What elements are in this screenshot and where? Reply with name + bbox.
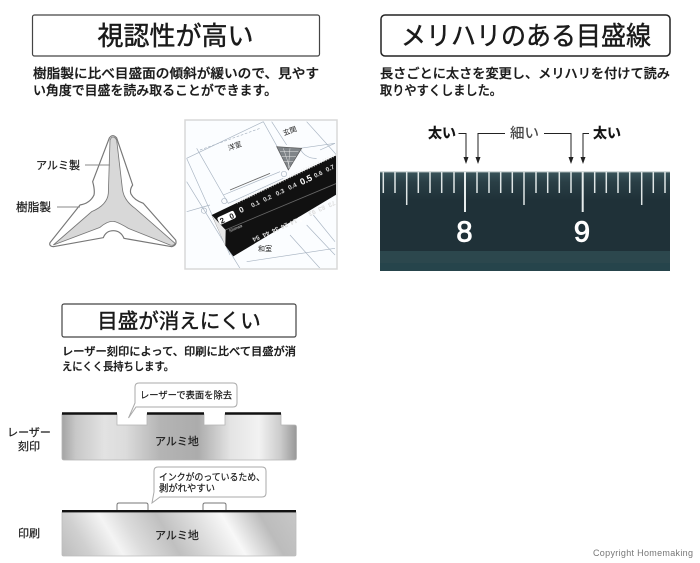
ruler: 24 [279, 221, 289, 230]
ink layer [62, 510, 296, 512]
ruler: 93 [307, 208, 316, 217]
callout: thick right: 太い [593, 125, 621, 141]
callout: thick left: 太い [428, 125, 456, 141]
text block: wear description: レーザー刻印によって、印刷に比べて目盛が消 [62, 344, 296, 358]
text block: wear description [62, 344, 296, 373]
ruler: 14 [288, 217, 298, 226]
ruler body [380, 172, 670, 271]
heading: visibility [32, 15, 320, 56]
label: printing: 印刷 [18, 527, 40, 540]
material label: アルミ地 [155, 529, 199, 542]
ruler: 83 [316, 203, 326, 213]
ruler: 0.5 [298, 173, 314, 187]
photo: ruler on blueprint [185, 120, 337, 269]
heading: contrast graduation lines [381, 15, 670, 56]
callout: laser removes surface [128, 383, 237, 418]
label: resin [16, 200, 80, 214]
label: laser engraving: レーザー [7, 426, 51, 439]
text block: wear description: えにくく長持ちします。 [62, 359, 174, 373]
callout: ink peels off [152, 467, 266, 503]
text block: visibility description [33, 66, 319, 98]
callout: thick left [428, 125, 468, 164]
callout: ink peels off: 剥がれやすい [159, 482, 215, 494]
label: laser engraving [7, 426, 51, 453]
ruler: 0 [238, 205, 246, 215]
callout: thin [476, 125, 574, 164]
ruler: 0.3 [275, 188, 286, 198]
tick marks: thin [383, 172, 665, 205]
ruler: 2 0 [218, 211, 236, 226]
heading: contrast graduation lines: メリハリのある目盛線 [401, 21, 651, 51]
heading: visibility: 視認性が高い [97, 21, 254, 51]
text block: contrast description [380, 66, 670, 98]
copyright: Copyright Homemaking [593, 548, 693, 558]
ruler: 0.4 [287, 182, 299, 192]
ruler: 54 [251, 233, 260, 243]
text block: contrast description: 長さごとに太さを変更し、メリハリを付けて読み [380, 66, 670, 81]
heading: hard to wear off [62, 304, 296, 337]
ruler: 44 [261, 229, 270, 238]
ruler: Shinwa [228, 223, 244, 233]
label: resin: 樹脂製 [16, 200, 52, 214]
photo: ruler on blueprint: 洋室 [227, 139, 243, 152]
callout: laser removes surface: レーザーで表面を除去 [140, 390, 232, 402]
diagram: printed section [62, 503, 296, 556]
label: aluminium: アルミ製 [36, 158, 80, 172]
chart: ruler scale closeup [380, 172, 670, 271]
diagram: laser engraved section [62, 414, 296, 460]
ruler: 73 [326, 199, 336, 208]
ruler: 34 [270, 225, 280, 234]
aluminium inner profile [53, 137, 175, 245]
callout: thick right [580, 125, 621, 164]
number 9: 9 [574, 216, 590, 248]
diagram: ruler cross-section [16, 136, 176, 247]
ruler: 0.7 [325, 164, 336, 174]
photo: ruler on blueprint: 玄関 [282, 124, 298, 137]
label: laser engraving: 刻印 [18, 439, 40, 453]
label: aluminium [36, 158, 110, 172]
ruler [212, 154, 337, 256]
black surface layers [62, 412, 281, 415]
text block: visibility description: 樹脂製に比べ目盛面の傾斜が緩いので、見やす [33, 66, 319, 81]
photo: ruler on blueprint: 和室 [258, 244, 272, 253]
text block: contrast description: 取りやすくしました。 [380, 83, 502, 98]
resin outer profile [50, 136, 176, 247]
material label: アルミ地 [155, 435, 199, 448]
callout: ink peels off: インクがのっているため、 [159, 472, 265, 484]
ruler: 0.2 [262, 194, 274, 204]
ruler: 0.6 [313, 169, 324, 180]
blueprint lines [187, 122, 337, 268]
ruler: 0.1 [250, 199, 262, 209]
heading: hard to wear off: 目盛が消えにくい [97, 310, 261, 333]
text block: visibility description: い角度で目盛を読み取ることができます。 [33, 83, 277, 98]
ruler: 04 [296, 212, 309, 225]
tick marks: thick [465, 172, 583, 212]
ink bumps [117, 503, 226, 511]
callout: thin: 細い [510, 125, 539, 141]
number 8: 8 [456, 216, 473, 248]
